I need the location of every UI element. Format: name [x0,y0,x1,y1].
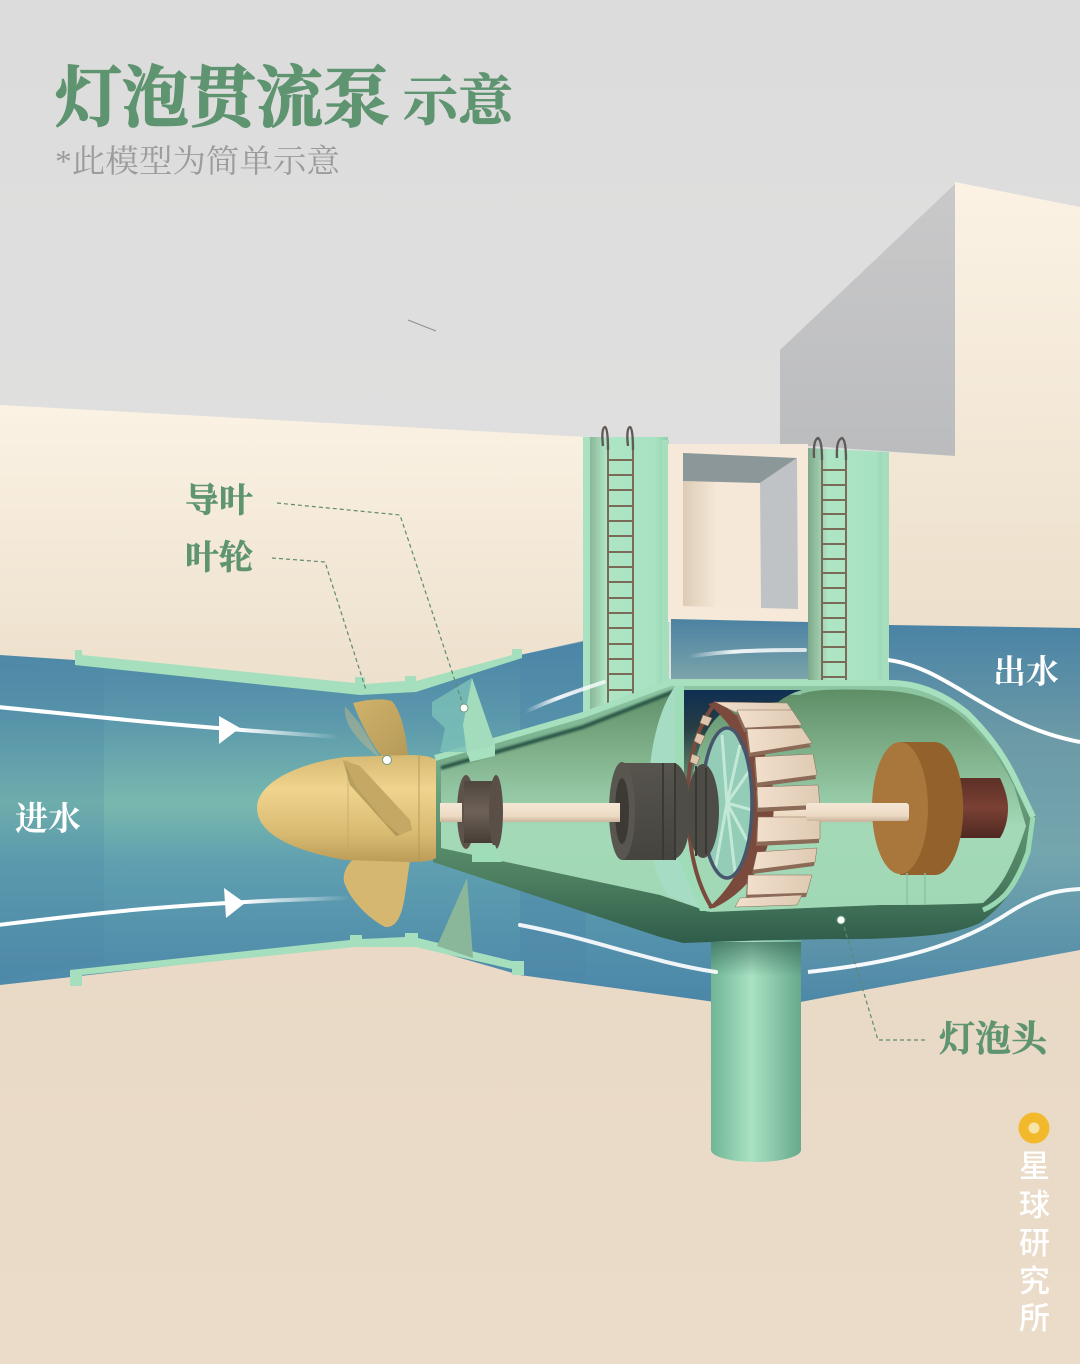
label: guide vane: 导叶 [185,482,253,520]
title: 示意 [403,71,516,132]
leader line: bulb head [837,916,925,1040]
main shaft [440,803,910,822]
rotor disc fill [702,728,752,878]
bulb hull: inner cavity [441,690,1026,912]
channel lining: upper [75,649,522,695]
pipe: vertical support [711,940,801,1162]
logo: vertical brand text: 星 [1019,1149,1050,1184]
ladder: left [602,427,633,710]
label: impeller: 叶轮 [185,539,253,577]
stator backing crescent [708,702,774,908]
upper concrete wall [0,405,586,700]
impeller blade: upper [345,699,408,758]
dark opening above stator [684,690,802,800]
hull rim highlight [435,683,1033,817]
stator teeth shadow [736,714,819,899]
logo: vertical brand text [1019,1149,1050,1336]
impeller blade: lower [344,847,410,927]
logo: ring icon [1018,1112,1050,1144]
logo: vertical brand text: 研 [1019,1226,1050,1261]
stator small left teeth [690,715,712,765]
impeller hub [257,755,436,862]
bulkhead partition [648,684,711,912]
access shaft: left with ladder [583,427,669,716]
leader line: guide vane [277,503,468,712]
lower concrete wall [0,930,1080,1364]
label: bulb head: 灯泡头 [938,1019,1050,1059]
leader line: impeller [272,558,392,764]
channel lining: lower [70,933,524,986]
bulb hull: lower shell and pipe [433,683,1036,1162]
logo: vertical brand text: 球 [1019,1188,1050,1223]
bearing: central grey [600,762,719,860]
generator disc: brown [806,742,963,905]
access shaft: right with ladder [808,438,889,696]
flow lines: white with arrows [0,650,1080,972]
hull upper inner shadow [441,691,675,768]
subtitle: *此模型为简单示意 [55,143,340,179]
logo: vertical brand text: 究 [1019,1264,1050,1299]
ladder: right [814,438,846,696]
rotor spokes [715,735,752,872]
guide vane: lower [437,878,473,958]
stator teeth [715,702,820,907]
gate chamber: centre opening [668,444,808,689]
bearing: front [440,775,503,862]
guide vane: upper [432,678,495,762]
end cap: brown cylinder [958,778,1008,838]
stator thin left arc [688,702,716,908]
water channel [0,625,1080,1002]
logo: vertical brand text: 所 [1019,1301,1050,1336]
label: water outlet: 出水 [993,654,1059,691]
title: 灯泡贯流泵 [53,62,390,136]
label: water inlet: 进水 [15,801,81,838]
concrete block: upper right [780,182,1080,640]
hull right rim [983,817,1033,910]
stator and rotor [688,702,820,908]
